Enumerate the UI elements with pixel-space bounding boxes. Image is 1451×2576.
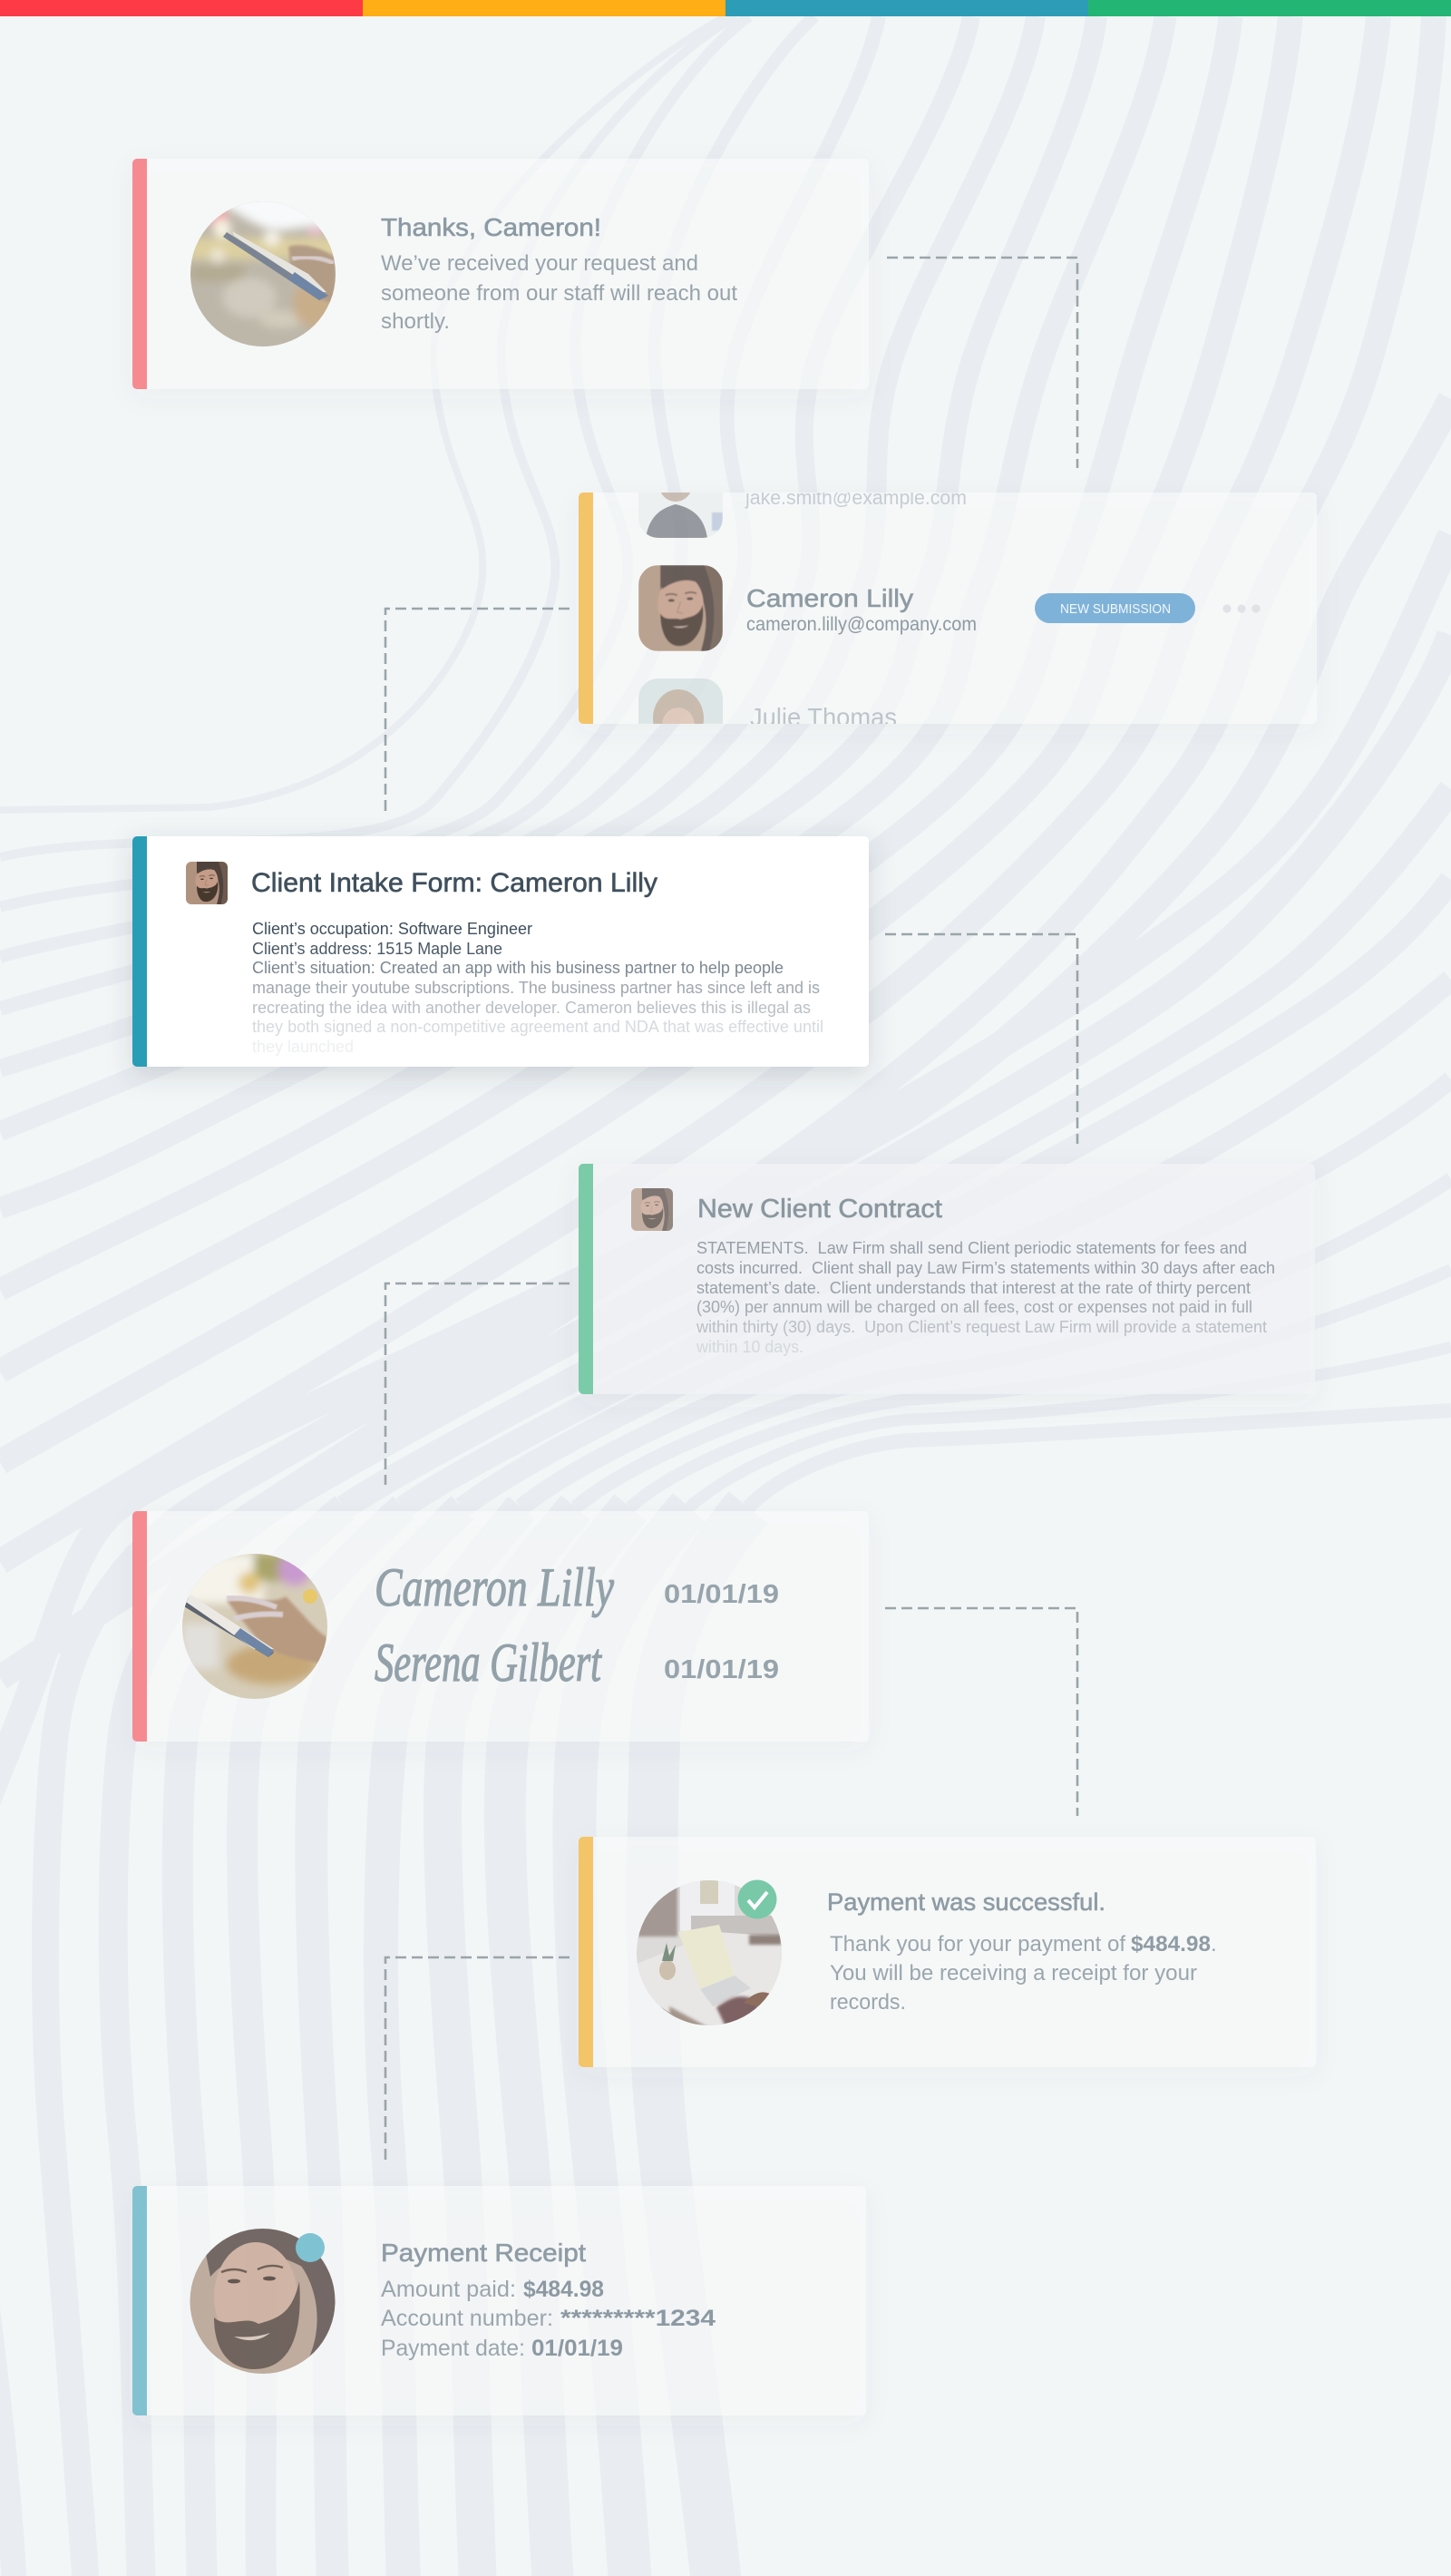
badge: new submission: NEW SUBMISSION bbox=[1060, 602, 1171, 617]
badge: new submission bbox=[1035, 593, 1195, 623]
message text: records. bbox=[830, 1990, 906, 2015]
message text: . bbox=[1211, 1932, 1217, 1956]
message text bbox=[381, 251, 737, 334]
receipt lines: Account number: bbox=[381, 2306, 553, 2331]
accent bar: blue bbox=[132, 2186, 147, 2415]
form text bbox=[252, 920, 823, 1056]
name: julie: Julie Thomas bbox=[750, 703, 897, 731]
panel: new client contract bbox=[579, 1164, 1315, 1394]
contract text: STATEMENTS. Law Firm shall send Client periodic statements for fees and bbox=[696, 1239, 1247, 1257]
receipt lines: Payment date: bbox=[381, 2336, 525, 2361]
heading: New Client Contract bbox=[697, 1195, 942, 1224]
receipt lines: Amount paid: bbox=[381, 2277, 516, 2302]
avatar: jake bbox=[638, 493, 723, 538]
message text: You will be receiving a receipt for your bbox=[830, 1961, 1197, 1986]
panel: submissions list bbox=[579, 493, 1317, 724]
contract text: costs incurred. Client shall pay Law Firm’s statements within 30 days after each bbox=[696, 1259, 1275, 1277]
avatar: julie bbox=[638, 678, 723, 724]
icon: check badge bbox=[738, 1879, 776, 1919]
panel: client intake form bbox=[132, 836, 869, 1067]
heading: Client Intake Form: Cameron Lilly bbox=[251, 868, 657, 898]
accent bar: red bbox=[132, 1511, 147, 1742]
top colour bar bbox=[0, 0, 1451, 16]
message text: We’ve received your request and bbox=[381, 251, 698, 276]
form text: Client’s address: 1515 Maple Lane bbox=[252, 940, 502, 958]
message text: $484.98 bbox=[1131, 1932, 1211, 1956]
date: cameron: 01/01/19 bbox=[664, 1580, 779, 1609]
email: jake: jake.smith@example.com bbox=[745, 486, 967, 509]
receipt lines bbox=[381, 2277, 716, 2361]
message text bbox=[830, 1932, 1217, 2015]
list rows bbox=[638, 493, 1261, 724]
photo: phone in hand bbox=[190, 201, 336, 346]
form text: Client’s occupation: Software Engineer bbox=[252, 920, 532, 938]
date: serena: 01/01/19 bbox=[664, 1655, 779, 1684]
connector: card 4 to card 5 bbox=[385, 1283, 570, 1485]
heading: Thanks, Cameron! bbox=[381, 213, 601, 241]
accent bar: red bbox=[132, 159, 147, 389]
receipt lines: 01/01/19 bbox=[531, 2336, 623, 2361]
avatar bbox=[631, 1188, 673, 1231]
contract text: statement’s date. Client understands that interest at the rate of thirty percent bbox=[696, 1279, 1251, 1297]
form text: they both signed a non-competitive agreement and NDA that was effective until bbox=[252, 1018, 823, 1036]
accent bar: yellow bbox=[579, 493, 593, 724]
message text: shortly. bbox=[381, 309, 450, 334]
heading: Payment was successful. bbox=[827, 1888, 1105, 1916]
icon: more dots bbox=[1222, 604, 1261, 613]
contract text: (30%) per annum will be charged on all fees, cost or expenses not paid in full bbox=[696, 1298, 1252, 1316]
name: cameron: Cameron Lilly bbox=[746, 584, 913, 612]
form text: Client’s situation: Created an app with his business partner to help people bbox=[252, 959, 784, 977]
avatar bbox=[186, 862, 228, 904]
signature: serena gilbert: Serena Gilbert bbox=[375, 1633, 602, 1693]
connector: card 2 to card 3 bbox=[385, 609, 570, 811]
connector: card 5 to card 6 bbox=[885, 1608, 1077, 1816]
icon: status dot bbox=[296, 2233, 325, 2262]
signature: cameron lilly: Cameron Lilly bbox=[375, 1557, 614, 1617]
message text: someone from our staff will reach out bbox=[381, 281, 737, 306]
form text: recreating the idea with another developer. Cameron believes this is illegal as bbox=[252, 999, 811, 1017]
form text: they launched bbox=[252, 1038, 354, 1056]
message text: Thank you for your payment of bbox=[830, 1932, 1125, 1956]
photo: cameron portrait bbox=[190, 2229, 336, 2375]
form text: manage their youtube subscriptions. The business partner has since left and is bbox=[252, 979, 820, 997]
panel: payment receipt bbox=[132, 2186, 722, 2415]
panel: thanks confirmation bbox=[132, 159, 869, 389]
connector: card 3 to card 4 bbox=[885, 934, 1077, 1144]
photo: laptop on desk bbox=[637, 1880, 782, 2036]
accent bar: yellow bbox=[579, 1837, 593, 2067]
contract text: within thirty (30) days. Upon Client’s request Law Firm will provide a statement bbox=[696, 1318, 1267, 1336]
connector: card 1 to card 2 bbox=[887, 258, 1077, 468]
panel: signatures bbox=[132, 1511, 778, 1742]
avatar: cameron bbox=[638, 565, 723, 651]
accent bar: teal bbox=[132, 836, 147, 1067]
heading: Payment Receipt bbox=[381, 2239, 586, 2267]
contract text: within 10 days. bbox=[696, 1338, 803, 1356]
email: cameron: cameron.lilly@company.com bbox=[746, 613, 977, 635]
receipt lines: *********1234 bbox=[560, 2306, 716, 2331]
photo: phone in hand bbox=[182, 1553, 327, 1699]
contract text bbox=[696, 1239, 1275, 1356]
accent bar: green bbox=[579, 1164, 593, 1394]
panel: payment success bbox=[579, 1837, 1215, 2067]
receipt lines: $484.98 bbox=[523, 2277, 604, 2302]
connector: card 6 to card 7 bbox=[385, 1957, 570, 2160]
